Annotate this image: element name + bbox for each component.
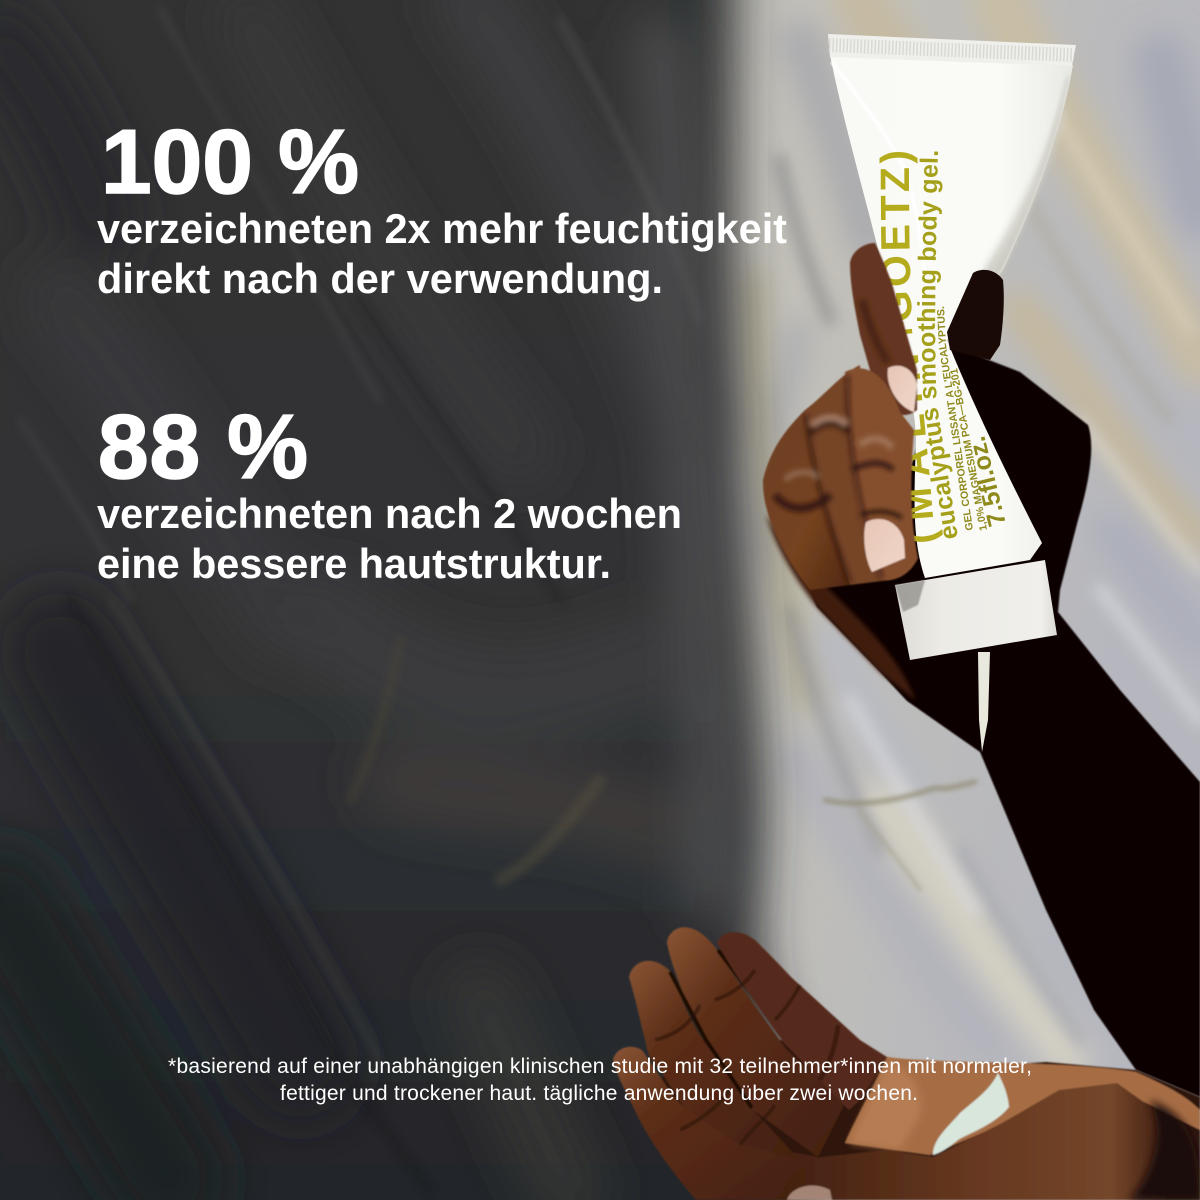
arm holding the tube bbox=[766, 345, 1200, 1097]
finger: outer knuckle bbox=[763, 410, 850, 590]
dark thumb over the tube bbox=[947, 270, 1004, 360]
statistic value 88 %: 88 % bbox=[98, 397, 308, 498]
statistic description 1: verzeichneten 2x mehr feuchtigkeit bbox=[97, 205, 787, 252]
thumb bbox=[780, 1083, 1170, 1200]
finger: middle knuckle bbox=[805, 365, 890, 585]
statistic value 100 %: 100 % bbox=[101, 112, 359, 213]
thumbnail bottom bbox=[864, 519, 905, 572]
statistic description 2: verzeichneten nach 2 wochen bbox=[97, 490, 682, 537]
footnote: fettiger und trockener haut. tägliche anwendung über zwei wochen. bbox=[280, 1082, 918, 1105]
product dollop bbox=[933, 1073, 1009, 1155]
tube body bbox=[830, 55, 1073, 578]
tube label: ingredients: 1,0% MAGNESIUM PCA—BG-201 bbox=[950, 368, 988, 530]
tube label: brand lower part: (MALIN+ bbox=[902, 322, 943, 542]
statistic description 2: eine bessere hautstruktur. bbox=[97, 540, 611, 587]
background: dark marble overlay bbox=[0, 0, 810, 1200]
finger: front knuckle bbox=[845, 368, 918, 580]
palm bbox=[640, 1040, 1200, 1200]
gripping hand: fingers bbox=[763, 243, 918, 590]
thumbnail bbox=[787, 1185, 832, 1200]
tube fold highlight bbox=[832, 62, 925, 280]
tube label: French description: GEL CORPOREL LISSANT A L'EUCALYPTUS. bbox=[937, 306, 972, 530]
footnote bbox=[168, 1055, 1032, 1105]
statistic block 2 bbox=[97, 397, 682, 587]
tube side shadow bbox=[955, 72, 1070, 325]
finger: pinky bbox=[613, 1047, 818, 1200]
finger gap shadow bbox=[670, 950, 850, 1108]
tube label: volume: 7.5fl.oz. bbox=[973, 436, 1006, 527]
knuckle shading bbox=[775, 300, 902, 582]
receiving hand bbox=[613, 927, 1200, 1200]
crimped tube seal bbox=[828, 34, 1076, 66]
finger: index bbox=[717, 932, 887, 1110]
finger: middle bbox=[667, 927, 845, 1157]
statistic block 1 bbox=[97, 112, 787, 302]
tube label: brand upper part: GOETZ) bbox=[880, 152, 918, 320]
squeezed product drip bbox=[978, 652, 990, 752]
product tube bbox=[828, 34, 1076, 660]
statistic description 1 bbox=[97, 205, 787, 302]
finger: ring bbox=[629, 961, 800, 1160]
footnote: *basierend auf einer unabhängigen klinischen studie mit 32 teilnehmer*innen mit normaler, bbox=[168, 1055, 1032, 1078]
palm light upper bbox=[845, 1057, 1200, 1155]
statistic description 2 bbox=[97, 490, 682, 587]
statistic description 1: direkt nach der verwendung. bbox=[97, 255, 663, 302]
tube cap bbox=[895, 560, 1057, 660]
index finger bbox=[850, 243, 917, 415]
finger creases bbox=[655, 970, 838, 1145]
tube label: product name: eucalyptus smoothing body gel. bbox=[917, 152, 958, 538]
thumbnail top bbox=[888, 366, 917, 412]
hand underside bbox=[766, 515, 915, 700]
